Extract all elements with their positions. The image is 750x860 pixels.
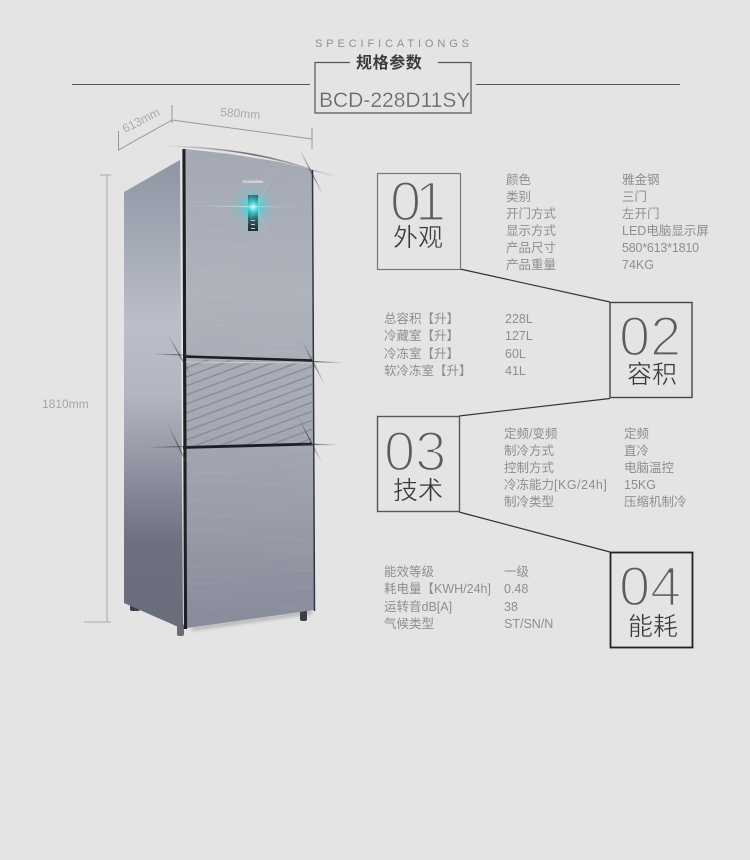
- specs 02: 冷冻室【升】: [384, 346, 459, 361]
- specs 03: 制冷类型: [504, 495, 554, 509]
- header rules and model box: [72, 84, 680, 86]
- specs 04: 一级: [504, 565, 530, 579]
- specs 01: 三门: [622, 189, 647, 204]
- refrigerator: [124, 145, 345, 636]
- brand logo: RONSHEN: [243, 179, 263, 184]
- specs 02: 软冷冻室【升】: [384, 363, 472, 378]
- specs 01: 产品重量: [506, 257, 556, 272]
- specs 04: 气候类型: [384, 616, 434, 631]
- specs 03: 直冷: [624, 444, 649, 458]
- dimension: width 580mm: [172, 105, 312, 149]
- specs 04: 能效等级: [384, 564, 435, 579]
- specs 03: 控制方式: [504, 460, 555, 475]
- heading: 规格参数: 规格参数: [356, 53, 422, 72]
- specs 03: 制冷方式: [504, 443, 555, 458]
- dimension: height 1810mm: [42, 175, 111, 622]
- dimension: width 580mm: 580mm: [220, 105, 261, 122]
- heading: SPECIFICATIONGS: SPECIFICATIONGS: [315, 38, 473, 50]
- model number: BCD-228D11SY: [319, 89, 470, 112]
- specs 04: ST/SN/N: [504, 617, 553, 631]
- specs 01: 颜色: [506, 172, 532, 187]
- specs 01: 580*613*1810: [622, 241, 699, 255]
- specs 04: 耗电量【KWH/24h]: [384, 582, 491, 596]
- dimension lines: [42, 105, 312, 622]
- right door edge: [312, 170, 314, 611]
- specs 01: 雅金钢: [622, 172, 660, 187]
- panel 01: 外观: 外观: [393, 224, 443, 252]
- panel 03: 技术: 技术: [393, 477, 443, 505]
- specs 03: 电脑温控: [624, 461, 675, 475]
- panel 03: 技术: [378, 416, 460, 512]
- LED display panel: [190, 170, 300, 245]
- specs 02: 228L: [505, 312, 533, 326]
- specs 01: 74KG: [622, 258, 654, 272]
- side panel: [124, 160, 183, 629]
- panel 02: 容积: 容积: [627, 361, 677, 389]
- header: [72, 38, 680, 113]
- specs 01: [506, 172, 709, 272]
- dimension: depth 613mm: [118, 105, 172, 150]
- specs 02: 127L: [505, 329, 533, 343]
- specs 01: LED电脑显示屏: [622, 224, 709, 238]
- panel 02: 容积: 02: [619, 304, 681, 368]
- panel 04: 能耗: [610, 552, 692, 648]
- dimension: depth 613mm: 613mm: [120, 105, 162, 136]
- specs 04: 0.48: [504, 582, 528, 596]
- door gaps: [183, 356, 312, 360]
- panel 02: 容积: [610, 302, 692, 398]
- specs 03: 定频/变频: [504, 426, 558, 441]
- specs 03: 15KG: [624, 478, 656, 492]
- specs 02: [384, 311, 533, 378]
- left door edge: [184, 149, 186, 629]
- specs 03: 定频: [624, 426, 650, 441]
- specs 01: 开门方式: [506, 206, 557, 221]
- panel 01: 外观: [378, 170, 460, 270]
- corner flares: [146, 146, 345, 470]
- connector lines: [459, 269, 610, 552]
- specs 03: 压缩机制冷: [624, 494, 687, 509]
- specs 04: [384, 564, 553, 631]
- front doors: [186, 149, 314, 628]
- middle door diagonal pattern: [186, 360, 312, 446]
- panel 01: 外观: 01: [390, 170, 446, 232]
- specs 01: 类别: [506, 190, 531, 204]
- specs 01: 显示方式: [506, 223, 557, 238]
- floor shadow and feet: [130, 604, 312, 636]
- panel 04: 能耗: 04: [619, 554, 681, 618]
- specs 02: 60L: [505, 347, 526, 361]
- brushed metal texture: [184, 145, 316, 631]
- dimension: height 1810mm: 1810mm: [42, 397, 89, 411]
- specs 02: 总容积【升】: [384, 311, 459, 326]
- specs 02: 冷藏室【升】: [384, 328, 459, 343]
- panel 04: 能耗: 能耗: [628, 613, 678, 641]
- specs 04: 运转音dB[A]: [384, 599, 452, 614]
- specs 03: 冷冻能力[KG/24h]: [504, 477, 607, 492]
- specs 01: 左开门: [622, 206, 660, 221]
- specs 01: 产品尺寸: [506, 241, 556, 255]
- specs 02: 41L: [505, 364, 526, 378]
- specs 04: 38: [504, 600, 518, 614]
- specs 03: [504, 426, 687, 509]
- panel 03: 技术: 03: [384, 420, 446, 482]
